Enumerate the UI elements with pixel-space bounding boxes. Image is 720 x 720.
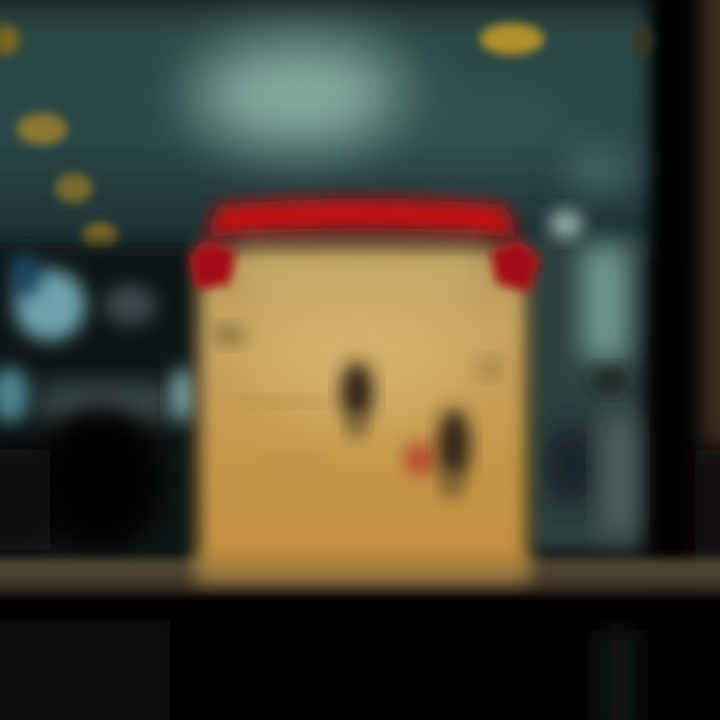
right dark pillar [650, 0, 720, 720]
shelf [0, 556, 720, 596]
yellow lights [0, 23, 651, 250]
left background objects [0, 245, 200, 555]
box texture [230, 396, 330, 406]
red ribbon [188, 198, 541, 292]
box lid panel [250, 258, 475, 300]
box mark left [211, 325, 245, 345]
dark figure left [341, 362, 373, 438]
dark figure right with red dot [405, 409, 470, 498]
right background objects [530, 140, 642, 550]
box mark right [475, 358, 505, 378]
lower dark area [0, 592, 720, 720]
tan box [198, 248, 528, 566]
